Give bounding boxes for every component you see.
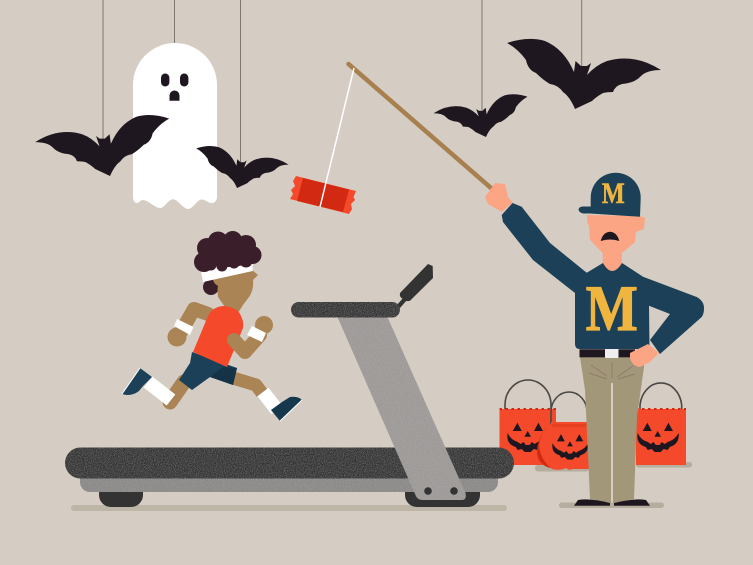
- front shoe: [271, 397, 302, 421]
- bat: left, in front of ghost: [35, 115, 169, 176]
- wheel right: [405, 490, 480, 507]
- fishing rod: [348, 64, 491, 188]
- console stem: [396, 297, 407, 308]
- cap: [578, 173, 641, 217]
- ghost eye left: [161, 74, 169, 86]
- pumpkin bag: middle: [537, 392, 590, 470]
- ghost body: [133, 43, 217, 209]
- ghost: [133, 43, 217, 209]
- front arm: [234, 335, 260, 352]
- scalloped rim: [636, 408, 686, 410]
- sweater letter: M: [586, 273, 638, 345]
- belt buckle: [605, 348, 618, 358]
- handle: [640, 383, 682, 411]
- upright post: [337, 316, 466, 500]
- back hand: [168, 328, 186, 346]
- sweater: [502, 203, 704, 354]
- bag shadow: right: [636, 462, 692, 468]
- rim: [552, 424, 590, 427]
- hand on hip: [630, 344, 659, 367]
- rear sock: [148, 382, 171, 400]
- jack-o-lantern face: [637, 423, 679, 452]
- front thigh: [233, 378, 262, 393]
- cap letter: M: [602, 177, 625, 210]
- pumpkin bag: left: [500, 380, 556, 465]
- fishing line: [320, 68, 354, 207]
- raised fist: [485, 183, 513, 212]
- pumpkin body: [539, 422, 590, 470]
- shorts shade: [210, 367, 237, 385]
- floor shadow: [71, 505, 507, 511]
- candy center: [297, 178, 349, 212]
- front shoe sole highlight: [280, 400, 302, 421]
- runner: [122, 231, 302, 421]
- headband: [201, 262, 253, 282]
- bat: large top right: [507, 39, 661, 109]
- bolt: [424, 487, 432, 495]
- neck and face: [587, 215, 645, 274]
- trouser creases: [589, 362, 635, 379]
- ghost eye right: [180, 74, 188, 86]
- shaded side: [537, 428, 560, 468]
- jack-o-lantern face: [552, 434, 588, 460]
- back wristband: [174, 319, 194, 335]
- back arm: [178, 309, 208, 337]
- handle: [551, 392, 587, 425]
- front sock: [263, 392, 277, 410]
- ghost mouth: [170, 90, 180, 101]
- front hand: [255, 316, 273, 334]
- rear shoe sole highlight: [122, 368, 140, 394]
- bolt: [450, 487, 458, 495]
- hair: [194, 231, 262, 272]
- hanging strings: [103, 0, 582, 165]
- deck base: [80, 477, 498, 492]
- bat: right of ghost: [196, 146, 289, 188]
- bag: [636, 409, 686, 465]
- handle: [505, 380, 551, 423]
- wheel left: [99, 490, 143, 507]
- shirt: [193, 306, 243, 367]
- right shoe: [614, 499, 650, 506]
- head and neck: [213, 270, 258, 313]
- bat: small top: [434, 94, 527, 137]
- trousers: [580, 357, 644, 503]
- console: [400, 264, 433, 301]
- left shoe: [574, 499, 610, 506]
- bag: [500, 409, 556, 465]
- belt: [65, 448, 514, 478]
- pumpkin bag: right: [636, 383, 686, 465]
- back hair: [203, 279, 219, 295]
- coach: [485, 173, 704, 508]
- bag shadow: middle: [535, 465, 589, 472]
- handlebar: [291, 302, 400, 318]
- treadmill: [65, 264, 514, 511]
- wrapper ends: [290, 176, 356, 214]
- rear thigh: [170, 382, 184, 402]
- scalloped rim: [500, 408, 556, 410]
- front wristband: [247, 326, 266, 342]
- candy bait: [290, 176, 356, 214]
- rear shoe: [122, 368, 152, 395]
- floor shadow: [559, 502, 664, 508]
- jack-o-lantern face: [507, 423, 549, 452]
- mouth: [601, 232, 619, 241]
- belt: [580, 349, 635, 357]
- shorts: [179, 352, 237, 390]
